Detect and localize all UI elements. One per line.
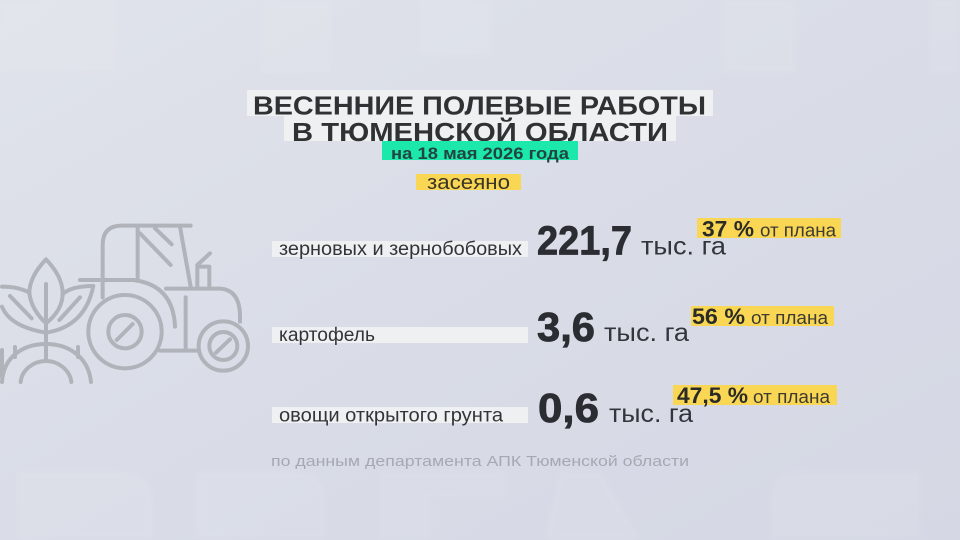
row: potatoes [272, 304, 834, 350]
plan badge [673, 383, 837, 408]
title: В ТЮМЕНСКОЙ ОБЛАСТИ [292, 117, 668, 147]
plan badge: от плана [753, 387, 831, 407]
plan badge: от плана [760, 220, 837, 240]
date badge: на 18 мая 2026 года [391, 144, 570, 163]
row label: картофель [279, 325, 375, 346]
row: open-ground vegetables [272, 383, 837, 431]
unit: тыс. га [604, 319, 689, 347]
title [247, 90, 713, 147]
unit: тыс. га [641, 232, 726, 260]
source note: по данным департамента АПК Тюменской области [271, 453, 689, 470]
row label: овощи открытого грунта [279, 406, 503, 426]
plan badge: 47,5 % [677, 383, 748, 408]
value: 0,6 [538, 385, 599, 431]
row: grain crops [272, 216, 841, 264]
value: 3,6 [537, 304, 595, 350]
icon: tractor with plant [2, 226, 248, 382]
plan badge: 37 % [702, 216, 754, 242]
unit: тыс. га [609, 400, 693, 428]
title: ВЕСЕННИЕ ПОЛЕВЫЕ РАБОТЫ [253, 90, 706, 120]
plan badge [697, 216, 841, 242]
plan badge [691, 304, 834, 329]
label: sown: засеяно [427, 172, 510, 194]
row label [272, 325, 528, 346]
plan badge: от плана [751, 308, 829, 328]
plan badge: 56 % [692, 304, 745, 329]
value: 221,7 [537, 218, 632, 264]
row label: зерновых и зернобобовых [279, 239, 523, 260]
